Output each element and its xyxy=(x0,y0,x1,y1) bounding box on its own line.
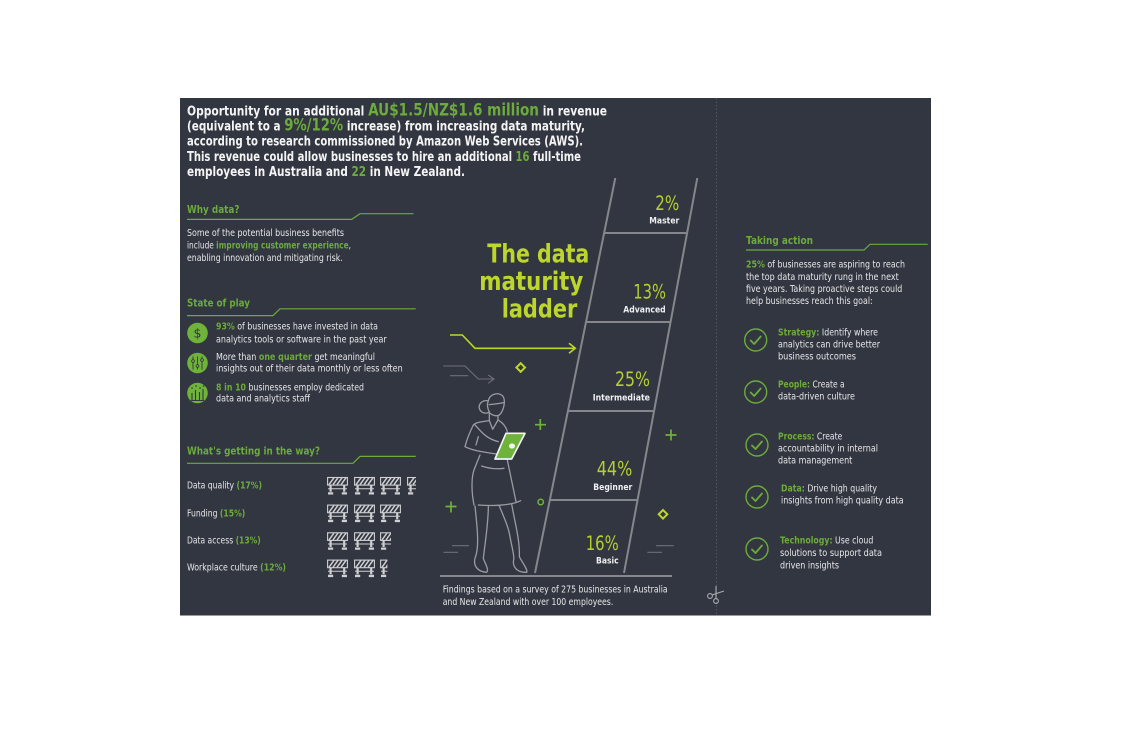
text: why data body: enabling innovation and mitigating risk. xyxy=(187,253,343,264)
stat: staff: 8 in 10 businesses employ dedicated xyxy=(216,382,364,393)
rung: master xyxy=(649,192,680,227)
text: why data body xyxy=(187,228,351,264)
text: taking action intro: the top data maturity rung in the next xyxy=(746,272,899,283)
step: people: People: Create a xyxy=(778,379,845,390)
step: process: Process: Create xyxy=(778,431,842,442)
step: data: insights from high quality data xyxy=(781,496,904,507)
stat: staff: data and analytics staff xyxy=(216,394,310,405)
title: the data maturity ladder: The data xyxy=(487,240,589,270)
dotted cut line xyxy=(716,98,718,615)
step: people: data-driven culture xyxy=(778,392,855,403)
rung: basic: Basic xyxy=(596,557,619,567)
title: the data maturity ladder xyxy=(479,240,589,324)
step: data xyxy=(781,484,904,507)
headline text: Opportunity for an additional AU$1.5/NZ$1.6 million in revenue xyxy=(187,100,607,120)
text: taking action intro xyxy=(746,260,905,307)
icon: check process xyxy=(746,434,768,456)
rung: intermediate xyxy=(593,368,650,404)
panel: why data xyxy=(187,203,414,264)
step: strategy: business outcomes xyxy=(778,351,856,362)
rung: advanced: 13% xyxy=(633,280,666,303)
footnote: Findings based on a survey of 275 businesses in Australia xyxy=(443,585,668,596)
rung: advanced xyxy=(623,280,666,316)
panel: barriers xyxy=(187,444,427,577)
ladder xyxy=(440,178,697,576)
icon: sliders xyxy=(187,353,208,373)
heading: state of play: State of play xyxy=(187,296,250,310)
icon: check people xyxy=(745,381,767,403)
icon: dollar: $ xyxy=(194,326,201,340)
arrow: grey xyxy=(443,366,494,383)
row: funding: Funding (15%) xyxy=(187,508,245,519)
icon: staff xyxy=(187,383,208,403)
headline text: This revenue could allow businesses to hire an additional 16 full-time xyxy=(187,150,581,165)
step: technology: Technology: Use cloud xyxy=(780,536,873,547)
icon: check data xyxy=(746,486,768,508)
row: workplace culture: Workplace culture (12%) xyxy=(187,563,286,574)
stat: investment: 93% of businesses have invested in data xyxy=(216,322,378,333)
headline text: employees in Australia and 22 in New Zealand. xyxy=(187,165,465,180)
rung: master: Master xyxy=(649,217,680,227)
text: why data body: Some of the potential business benefits xyxy=(187,228,344,239)
rung: master: 2% xyxy=(655,192,679,215)
text: why data body: include improving customer experience, xyxy=(187,241,351,252)
row: data access: Data access (13%) xyxy=(187,536,261,547)
stat: insights: insights out of their data monthly or less often xyxy=(216,364,403,375)
row: funding xyxy=(187,505,400,522)
stat: insights xyxy=(216,352,403,375)
step: data: Data: Drive high quality xyxy=(781,484,877,495)
rung: basic: 16% xyxy=(586,532,619,555)
step: process: accountability in internal xyxy=(778,444,878,455)
stat: insights: More than one quarter get meaningful xyxy=(216,352,375,363)
arrow: lime xyxy=(450,335,575,353)
text: taking action intro: help businesses reach this goal: xyxy=(746,296,873,307)
rung: beginner: Beginner xyxy=(593,483,633,493)
footnote xyxy=(443,585,668,608)
text: taking action intro: five years. Taking proactive steps could xyxy=(746,284,902,295)
footnote: and New Zealand with over 100 employees. xyxy=(443,597,613,608)
heading: taking action: Taking action xyxy=(746,234,813,247)
panel: taking action xyxy=(745,234,928,571)
title: the data maturity ladder: ladder xyxy=(502,294,578,324)
figure: woman with tablet xyxy=(465,394,527,572)
icon: diamond top xyxy=(516,363,525,372)
icon: check strategy xyxy=(745,329,767,351)
decorations: plus signs and dashes xyxy=(444,419,676,552)
step: strategy xyxy=(778,327,880,362)
rung: beginner: 44% xyxy=(597,458,632,481)
background panel xyxy=(180,98,931,616)
heading: why data: Why data? xyxy=(187,203,240,216)
text: taking action intro: 25% of businesses are aspiring to reach xyxy=(746,260,905,271)
step: technology: driven insights xyxy=(780,560,839,571)
step: technology: solutions to support data xyxy=(780,548,882,559)
heading: barriers: What's getting in the way? xyxy=(187,444,320,458)
row: data access xyxy=(187,533,400,550)
rung: basic xyxy=(586,532,619,567)
rung: intermediate: Intermediate xyxy=(593,394,650,404)
stat: investment xyxy=(216,322,387,345)
step: strategy: Strategy: Identify where xyxy=(778,327,878,338)
rung: advanced: Advanced xyxy=(623,306,666,316)
panel: state of play xyxy=(187,296,416,405)
stat: staff xyxy=(216,382,364,405)
row: data quality xyxy=(187,478,427,494)
step: people xyxy=(778,379,855,403)
stat: investment: analytics tools or software in the past year xyxy=(216,334,387,345)
headline text: (equivalent to a 9%/12% increase) from increasing data maturity, xyxy=(187,116,585,136)
icon: dollar xyxy=(187,323,208,343)
row: workplace culture xyxy=(187,560,400,577)
icon: scissors xyxy=(708,586,724,603)
headline text: according to research commissioned by Amazon Web Services (AWS). xyxy=(187,134,583,150)
headline text xyxy=(187,100,607,180)
step: process: data management xyxy=(778,455,853,466)
step: process xyxy=(778,431,878,466)
step: strategy: analytics can drive better xyxy=(778,339,880,350)
title: the data maturity ladder: maturity xyxy=(479,267,584,297)
rung: beginner xyxy=(593,458,633,493)
row: data quality: Data quality (17%) xyxy=(187,480,262,491)
rung: intermediate: 25% xyxy=(615,368,650,391)
icon: check technology xyxy=(746,538,768,560)
step: technology xyxy=(780,536,882,571)
